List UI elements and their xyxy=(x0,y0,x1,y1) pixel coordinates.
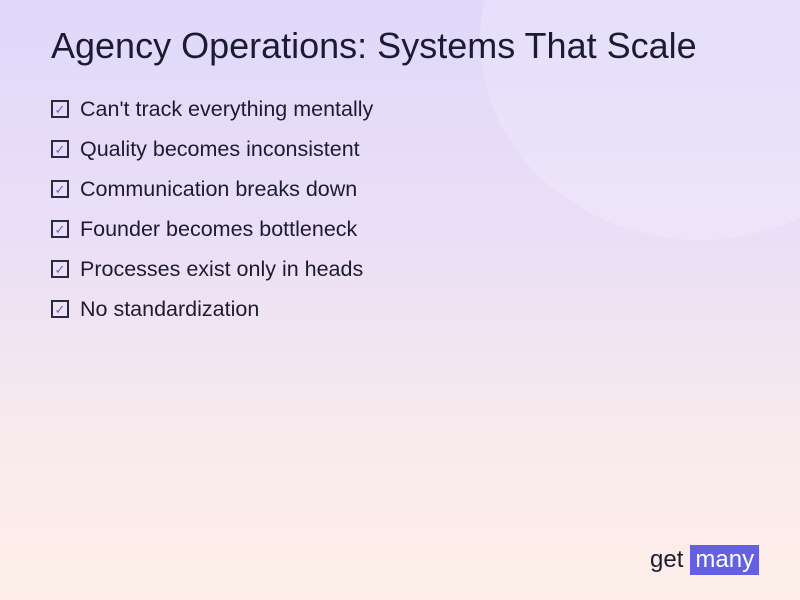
item 4: Founder becomes bottleneck xyxy=(80,216,357,240)
logo: get xyxy=(650,546,683,573)
item 2: ✓ xyxy=(55,142,65,156)
item 1: Can't track everything mentally xyxy=(80,96,373,120)
item 4: ✓ xyxy=(55,222,65,236)
item 6: ✓ xyxy=(55,302,65,316)
item 5: ✓ xyxy=(55,262,65,276)
item 3: Communication breaks down xyxy=(80,176,357,200)
logo xyxy=(650,545,759,575)
item 6: No standardization xyxy=(80,296,259,320)
item 2: Quality becomes inconsistent xyxy=(80,136,360,160)
title: Agency Operations: Systems That Scale xyxy=(51,25,697,66)
checklist xyxy=(51,96,374,320)
logo: many xyxy=(695,546,754,573)
item 3: ✓ xyxy=(55,182,65,196)
item 5: Processes exist only in heads xyxy=(80,256,363,280)
item 1: ✓ xyxy=(55,102,65,116)
